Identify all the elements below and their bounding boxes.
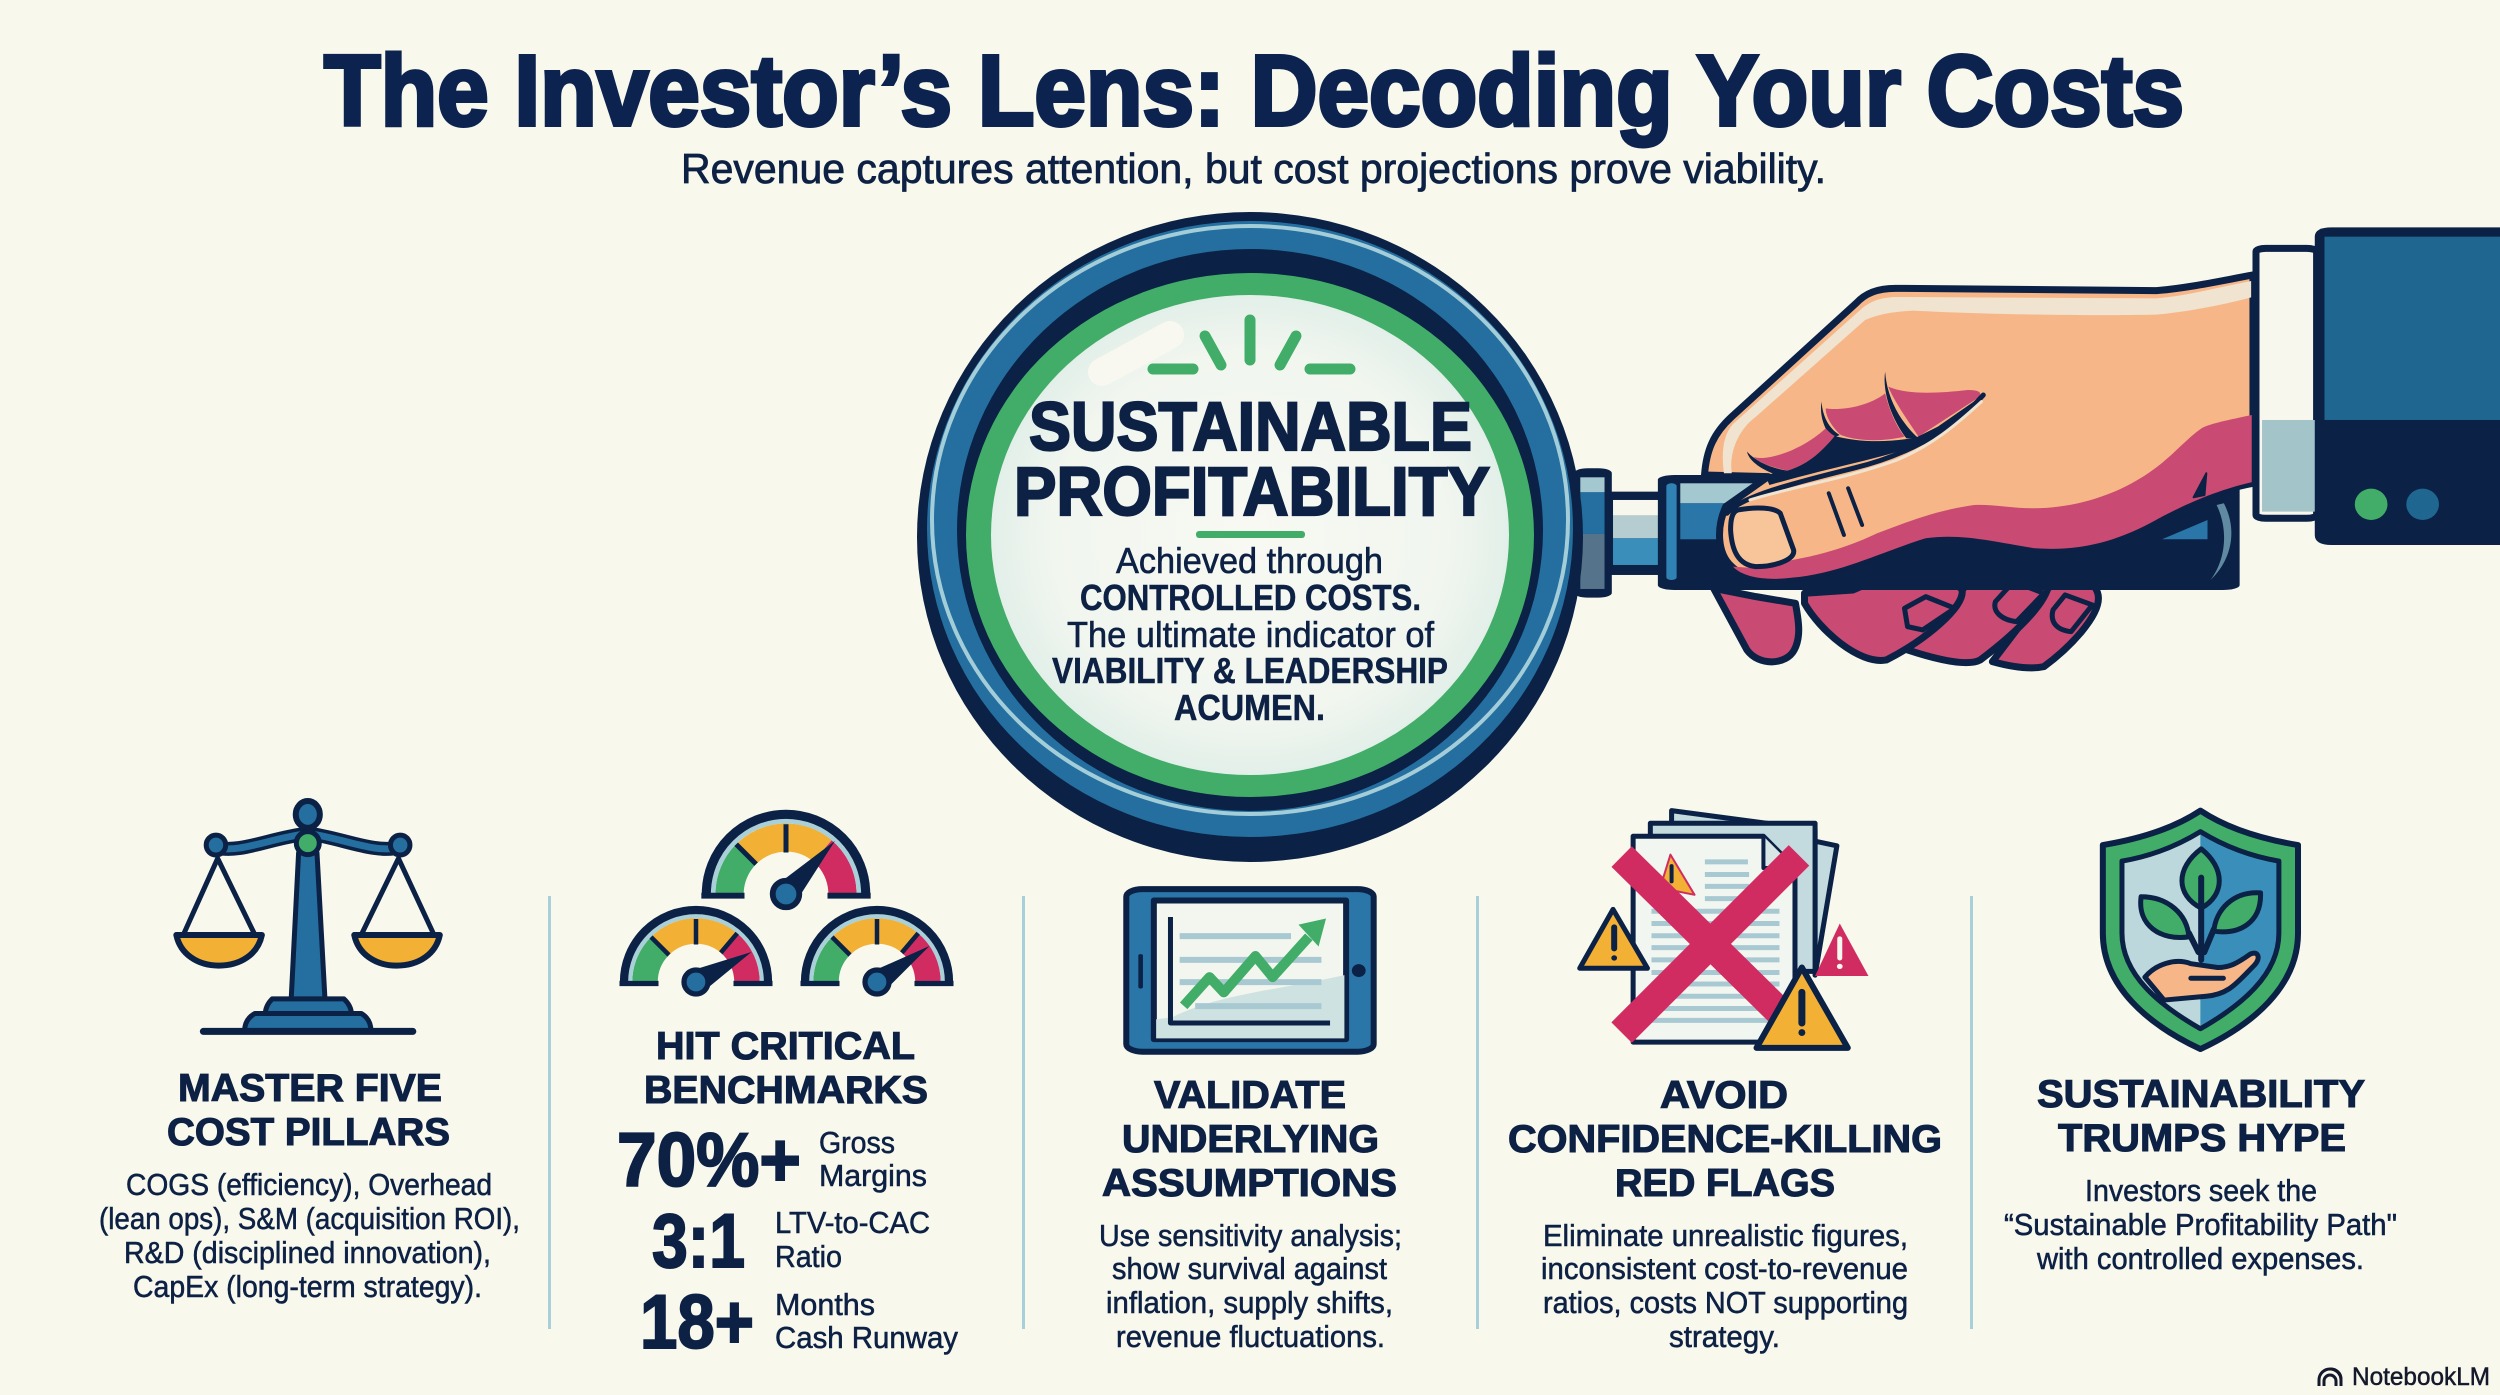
magnifying glass <box>917 212 1583 862</box>
icon: shield with plant <box>2103 811 2298 1049</box>
panel: master five cost pillars <box>99 801 520 1304</box>
lens heading: PROFITABILITY <box>1014 453 1490 530</box>
body text <box>1541 1218 1908 1354</box>
panel: sustainability trumps hype <box>2004 811 2397 1276</box>
icon: left gauge <box>620 910 772 994</box>
lens body text <box>1052 540 1448 728</box>
body text <box>1099 1218 1402 1354</box>
body text: COGS (efficiency), Overhead <box>126 1167 492 1202</box>
heading: BENCHMARKS <box>644 1069 928 1112</box>
lower fingers <box>1714 567 2098 668</box>
heading: HIT CRITICAL <box>656 1025 915 1068</box>
body text: ratios, costs NOT supporting <box>1543 1285 1908 1320</box>
icon: notebooklm arcs <box>2319 1369 2341 1386</box>
stat: ltv to cac: 3:1 <box>652 1199 745 1284</box>
subtitle: Revenue captures attention, but cost projections prove viability. <box>681 145 1826 192</box>
notebooklm logo <box>2319 1363 2490 1391</box>
icon: crossed-out documents <box>1580 811 1868 1048</box>
stat: ltv to cac: LTV-to-CAC <box>775 1205 930 1240</box>
collar <box>1574 468 1612 598</box>
stat: gross margins <box>617 1118 927 1203</box>
body text: Eliminate unrealistic figures, <box>1543 1218 1908 1253</box>
panel: validate underlying assumptions <box>1099 889 1402 1354</box>
stat: ltv to cac: Ratio <box>775 1239 842 1274</box>
stat: ltv to cac <box>652 1199 930 1284</box>
body text: strategy. <box>1669 1319 1780 1354</box>
stat: gross margins: Gross <box>819 1125 895 1160</box>
jacket sleeve <box>2315 227 2500 545</box>
stat: cash runway <box>640 1280 958 1365</box>
body text: “Sustainable Profitability Path" <box>2004 1207 2397 1242</box>
sleeve cuff <box>2256 248 2317 518</box>
heading: AVOID <box>1660 1074 1788 1117</box>
lens body text: CONTROLLED COSTS. <box>1080 577 1421 618</box>
heading: MASTER FIVE <box>178 1067 442 1110</box>
heading <box>1102 1074 1397 1205</box>
stat: gross margins: 70%+ <box>617 1118 801 1203</box>
icon: balance scale <box>176 801 440 1031</box>
heading: UNDERLYING <box>1122 1118 1379 1161</box>
body text <box>2004 1173 2397 1276</box>
heading <box>1508 1074 1942 1205</box>
stat: gross margins: Margins <box>819 1158 927 1193</box>
icon: tablet chart <box>1126 889 1374 1052</box>
grip <box>1658 475 2240 590</box>
icon: green rays <box>1153 320 1350 369</box>
icon: top gauge <box>701 814 871 907</box>
lens rim <box>917 212 1583 862</box>
hand body <box>1705 275 2253 580</box>
body text: Investors seek the <box>2085 1173 2317 1208</box>
heading <box>644 1025 928 1112</box>
panel: avoid red flags <box>1508 811 1942 1354</box>
lens body text: VIABILITY & LEADERSHIP <box>1052 650 1448 691</box>
brand text: NotebookLM <box>2352 1363 2490 1391</box>
heading: TRUMPS HYPE <box>2058 1117 2346 1160</box>
pink shadows between fingers <box>1727 372 1983 513</box>
heading: ASSUMPTIONS <box>1102 1162 1397 1205</box>
body text: revenue fluctuations. <box>1116 1319 1385 1354</box>
body text <box>99 1167 520 1304</box>
stat: cash runway: Cash Runway <box>775 1320 958 1355</box>
thumb knuckle lines <box>1829 488 1862 535</box>
heading: SUSTAINABILITY <box>2037 1073 2365 1116</box>
lens heading: SUSTAINABLE <box>1029 388 1472 465</box>
hand holding magnifier <box>1574 227 2500 668</box>
lens heading <box>1014 388 1490 530</box>
handle neck <box>1611 492 1662 575</box>
heading <box>167 1067 450 1154</box>
body text: with controlled expenses. <box>2036 1241 2364 1276</box>
heading: COST PILLARS <box>167 1111 450 1154</box>
body text: (lean ops), S&M (acquisition ROI), <box>99 1201 520 1236</box>
lens body text: Achieved through <box>1116 540 1383 581</box>
body text: R&D (disciplined innovation), <box>124 1235 491 1270</box>
thumbnail <box>1731 508 1794 567</box>
heading: RED FLAGS <box>1615 1162 1835 1205</box>
lens underline <box>1196 531 1305 538</box>
body text: show survival against <box>1112 1251 1387 1286</box>
lens body text: The ultimate indicator of <box>1067 614 1435 655</box>
body text: inflation, supply shifts, <box>1106 1285 1393 1320</box>
panel: hit critical benchmarks <box>617 814 958 1365</box>
stat: cash runway: Months <box>775 1287 875 1322</box>
body text: CapEx (long-term strategy). <box>133 1269 482 1304</box>
body text: inconsistent cost-to-revenue <box>1541 1251 1908 1286</box>
icon: right gauge <box>800 910 954 994</box>
dividers <box>548 896 1973 1329</box>
title: The Investor’s Lens: Decoding Your Costs <box>324 35 2184 147</box>
green ring and glass <box>966 273 1534 797</box>
heading: VALIDATE <box>1154 1074 1346 1117</box>
heading <box>2037 1073 2365 1160</box>
lens body text: ACUMEN. <box>1174 687 1325 728</box>
stat: cash runway: 18+ <box>640 1280 754 1365</box>
body text: Use sensitivity analysis; <box>1099 1218 1402 1253</box>
heading: CONFIDENCE-KILLING <box>1508 1118 1942 1161</box>
